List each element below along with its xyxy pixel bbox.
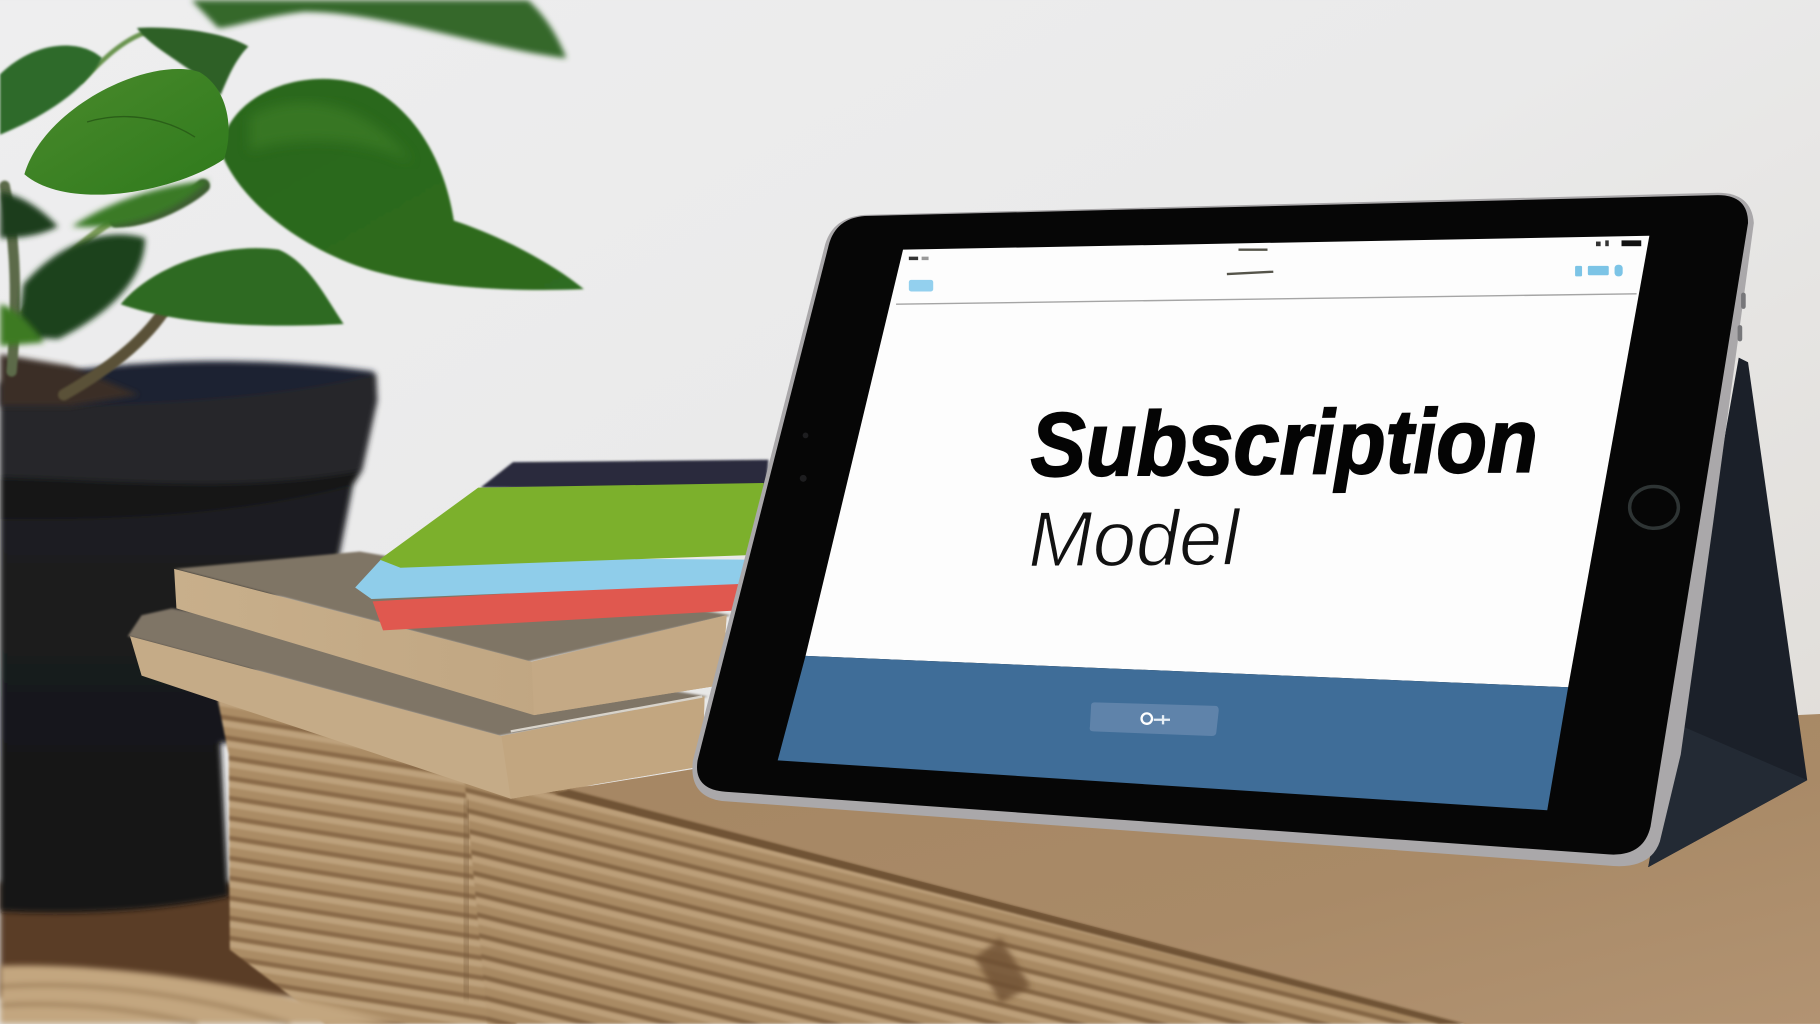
big center leaf (221, 79, 584, 290)
screen (806, 236, 1649, 687)
lower leaf (121, 248, 344, 326)
front camera (800, 432, 808, 482)
tablet silver edge (692, 193, 1754, 866)
blue footer band (778, 656, 1568, 810)
header right icons (1575, 265, 1623, 276)
folder: navy (481, 460, 768, 490)
tablet stand (1648, 358, 1807, 867)
header title bars (1227, 250, 1273, 274)
floor shelf (0, 882, 302, 998)
header divider (896, 294, 1637, 304)
tablet (692, 193, 1754, 866)
leaf behind main (137, 28, 248, 95)
upper book (174, 551, 731, 715)
corrugated wood block (215, 685, 1474, 1024)
small dark leaves (0, 180, 209, 346)
side buttons (1738, 293, 1746, 341)
soil (0, 354, 139, 406)
basket (0, 965, 400, 1024)
header left tab (909, 280, 933, 291)
back top leaf (192, 0, 566, 58)
folder: green (380, 483, 764, 568)
folder: red (373, 580, 743, 630)
big leaf highlight (250, 102, 412, 163)
plant stems (5, 33, 203, 395)
status bar (909, 240, 1641, 260)
subheading: Model: Model (1028, 494, 1242, 584)
lower book (128, 608, 708, 799)
main bright leaf (24, 69, 229, 195)
plant pot (0, 361, 377, 913)
left top leaf (0, 45, 102, 135)
home button (1630, 486, 1678, 528)
leaf midrib (87, 117, 195, 137)
footer button (1090, 702, 1219, 736)
heading: Subscription: Subscription (1030, 391, 1538, 496)
folder: blue (355, 557, 745, 599)
tablet bezel (697, 195, 1748, 855)
cardboard desk surface (555, 714, 1820, 1024)
